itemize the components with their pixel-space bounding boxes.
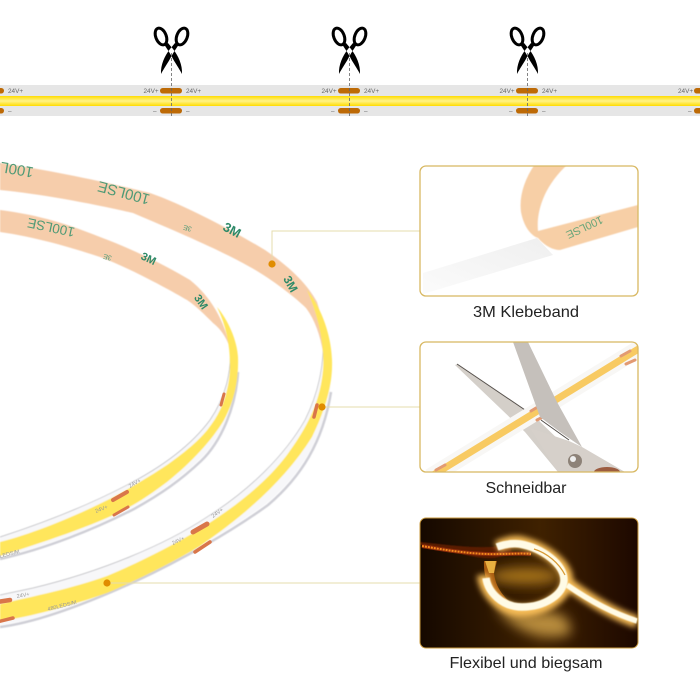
- tape print: 3E: [182, 223, 193, 232]
- callout line: flexible: [107, 582, 420, 584]
- strip labels: –: [509, 108, 513, 115]
- strip labels: 24V+: [542, 88, 557, 95]
- caption: 3M tape: 3M Klebeband: [473, 304, 579, 321]
- strip printing: 480LEDS/M: [47, 600, 78, 613]
- led strip: [430, 345, 645, 477]
- callout dot: flexible: [103, 579, 111, 587]
- caption: flexible: Flexibel und biegsam: [450, 655, 602, 672]
- icon: scissors 2: [331, 26, 368, 116]
- strip labels: 24V+: [186, 88, 201, 95]
- glow inside loop: [489, 568, 561, 584]
- callout dot: tape: [268, 260, 276, 268]
- strip printing: 24V+: [128, 478, 142, 490]
- loop glow: [483, 542, 637, 622]
- caption: cuttable: Schneidbar: [486, 480, 567, 497]
- screw: [568, 454, 582, 468]
- contact pads: [0, 88, 700, 114]
- strip labels: –: [186, 108, 190, 115]
- tape print: 100LSE: [96, 177, 152, 207]
- tape print: 3E: [102, 252, 113, 261]
- upper blade: [513, 342, 582, 447]
- coiled LED strip photo: [0, 154, 332, 627]
- strip labels: 24V+: [322, 88, 337, 95]
- strip labels: –: [331, 108, 335, 115]
- panel: flexible: [420, 518, 638, 648]
- callout line: cut: [322, 406, 420, 408]
- strip labels: –: [364, 108, 368, 115]
- tape print: 3M: [280, 273, 301, 295]
- underside wedge: [484, 561, 510, 602]
- panel: 3M tape: 100LSE: [564, 213, 605, 240]
- handle: [594, 467, 620, 472]
- strip labels: –: [688, 108, 692, 115]
- tape print: 3M: [191, 293, 210, 312]
- tape print: 3M: [221, 219, 244, 241]
- panel: cuttable: [420, 342, 645, 477]
- callout dot: cut: [318, 403, 326, 411]
- panel: 3M tape: [420, 164, 638, 296]
- strip printing: 24V+: [16, 592, 30, 600]
- strip labels: [8, 88, 693, 115]
- loop light band: [486, 544, 564, 607]
- tape print: 100LSE: [26, 215, 76, 240]
- strip labels: 24V+: [500, 88, 515, 95]
- outer loop: [0, 163, 332, 627]
- strip printing: 24V+: [95, 504, 109, 515]
- LED strip diagram: [0, 85, 700, 116]
- strip printing: [0, 478, 225, 613]
- icon: scissors 3: [509, 26, 546, 116]
- strip labels: –: [8, 108, 12, 115]
- solder pads: [0, 394, 317, 622]
- reflection under loop: [495, 604, 571, 637]
- inner loop: [0, 210, 238, 559]
- strip labels: 24V+: [678, 88, 693, 95]
- lower blade: [455, 364, 558, 472]
- strip labels: 24V+: [8, 88, 23, 95]
- strip labels: 24V+: [364, 88, 379, 95]
- strip printing: 24V+: [211, 507, 225, 520]
- icon: scissors 1: [153, 26, 190, 116]
- tape print: 3M: [139, 251, 158, 268]
- strip labels: 24V+: [144, 88, 159, 95]
- strip labels: –: [542, 108, 546, 115]
- callout line: tape: [272, 231, 420, 264]
- tape print: [0, 154, 301, 312]
- strip printing: 24V+: [171, 536, 186, 547]
- strip labels: –: [153, 108, 157, 115]
- red dotted strip: [420, 542, 512, 558]
